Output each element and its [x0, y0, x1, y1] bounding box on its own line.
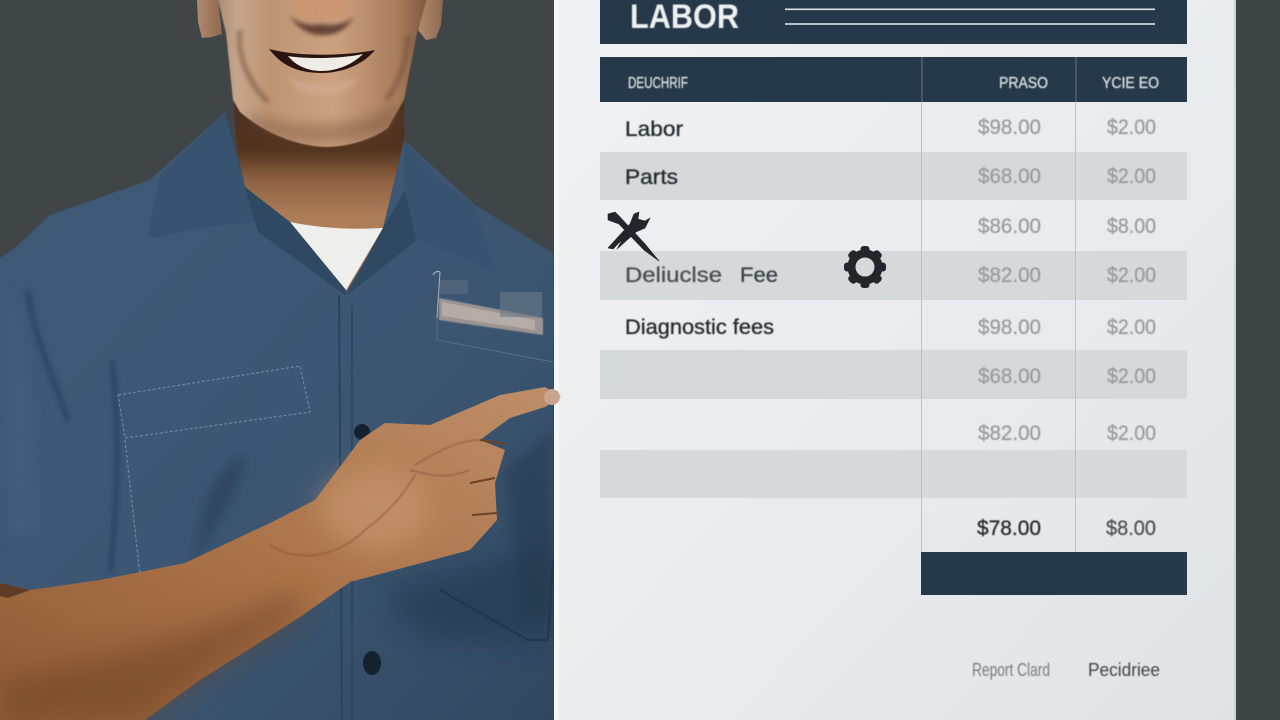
price column: $82.00: [978, 422, 1041, 445]
shadow right edge: [506, 438, 552, 574]
t-shirt: [290, 222, 383, 290]
amount column: $2.00: [1107, 422, 1156, 445]
price column: $86.00: [978, 215, 1041, 238]
title bar: [600, 0, 1187, 44]
row labels: Diagnostic fees: [625, 316, 774, 339]
face: [216, 0, 429, 147]
pocket: [118, 366, 310, 575]
amount column: $2.00: [1107, 365, 1156, 388]
pocket fold shadow: [196, 459, 244, 552]
footer text: report card: Report Clard: [972, 660, 1050, 680]
price column: $68.00: [978, 165, 1041, 188]
price column: $98.00: [978, 316, 1041, 339]
price column: [977, 116, 1041, 540]
teeth: [288, 54, 363, 71]
right lapel: [346, 190, 417, 296]
hand highlight: [320, 470, 430, 550]
lower lip: [288, 77, 358, 96]
ears: [197, 0, 443, 40]
header label: value: YCIE EO: [1102, 75, 1159, 92]
price column: $78.00: [977, 517, 1041, 540]
icon: crossed tools: [608, 212, 659, 261]
amount column: $2.00: [1107, 116, 1156, 139]
amount column: $2.00: [1107, 316, 1156, 339]
shadow under arm: [392, 556, 554, 640]
price column: $68.00: [978, 365, 1041, 388]
smile lines: [239, 30, 408, 102]
title bar rules: [785, 8, 1155, 25]
arm underside shading: [0, 590, 300, 720]
amount column: $2.00: [1107, 264, 1156, 287]
row labels: Labor: [625, 118, 683, 141]
row labels: Fee: [740, 264, 778, 287]
header label: description: DEUCHRIF: [628, 75, 688, 92]
table row stripes: [600, 152, 1187, 498]
shirt shadows: [6, 290, 553, 640]
row labels: Parts: [625, 166, 678, 189]
lower right pocket: [440, 560, 553, 640]
icon: gear: [844, 246, 886, 288]
fingernail: [544, 389, 560, 405]
chin shading: [250, 102, 398, 144]
arm and pointing hand: [0, 387, 561, 720]
amount column: $8.00: [1106, 517, 1156, 540]
mechanic figure: [0, 0, 561, 720]
footer text: signature: Pecidriee: [1088, 660, 1160, 680]
shirt body: [0, 112, 553, 720]
sleeve crease at arm: [0, 583, 30, 598]
invoice panel: [554, 0, 1236, 720]
right background strip: [1236, 0, 1280, 720]
price column: $98.00: [978, 116, 1041, 139]
hand veins: [270, 440, 480, 556]
right collar: [404, 140, 495, 272]
column dividers: [921, 102, 1076, 552]
nose highlight: [294, 0, 350, 22]
mouth: [269, 49, 375, 73]
amount column: $2.00: [1107, 165, 1156, 188]
left lapel: [245, 187, 346, 296]
amount column: [1106, 116, 1156, 540]
table header: [600, 57, 1187, 102]
row labels: Deliuclse: [625, 264, 722, 287]
total bar: [921, 552, 1187, 595]
placket and button line: [339, 295, 381, 720]
row labels: [625, 118, 778, 339]
sleeve highlight: [6, 290, 40, 540]
nose shadow: [289, 15, 354, 35]
amount column: $8.00: [1107, 215, 1156, 238]
neck: [233, 95, 405, 292]
left collar: [148, 112, 256, 238]
price column: $82.00: [978, 264, 1041, 287]
sleeve fold shading: [28, 290, 117, 572]
name badge: [433, 271, 553, 362]
header label: price: PRASO: [999, 75, 1048, 92]
finger folds: [470, 440, 505, 515]
